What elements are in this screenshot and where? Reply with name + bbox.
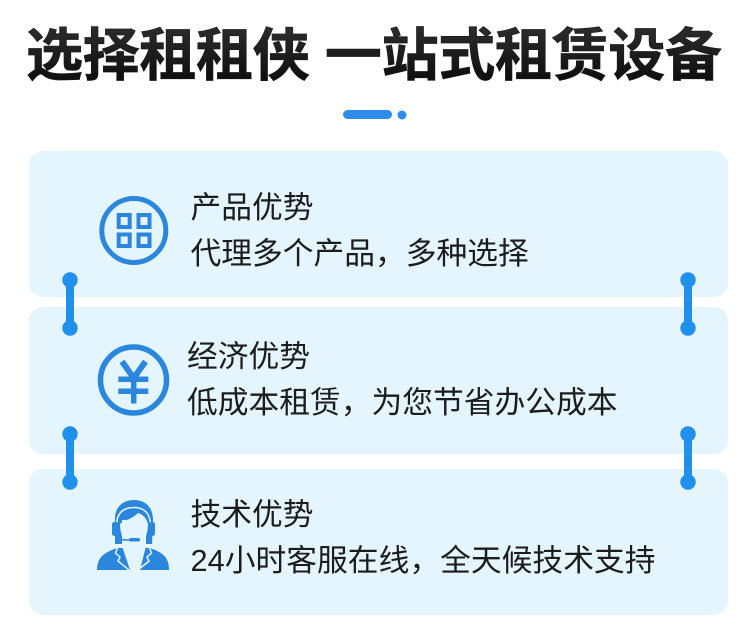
panel: economic advantage bbox=[29, 307, 728, 454]
icon: grid bbox=[102, 198, 166, 262]
heading: economic advantage: 经济优势 bbox=[187, 339, 310, 374]
icon: yen coin bbox=[100, 347, 166, 413]
panel: product advantage bbox=[29, 151, 728, 297]
connector: left bottom bbox=[62, 426, 78, 490]
text: technical advantage: 24小时客服在线，全天候技术支持 bbox=[190, 543, 656, 578]
icon: support agent bbox=[97, 500, 169, 570]
heading: technical advantage: 技术优势 bbox=[190, 497, 314, 532]
panel: technical advantage bbox=[29, 469, 728, 615]
text: product advantage: 代理多个产品，多种选择 bbox=[190, 236, 529, 271]
connector: right top bbox=[680, 272, 696, 336]
connector: left top bbox=[62, 272, 78, 336]
text: economic advantage: 低成本租赁，为您节省办公成本 bbox=[187, 385, 618, 420]
title: 选择租租侠 一站式租赁设备 bbox=[26, 24, 722, 88]
heading: product advantage: 产品优势 bbox=[190, 190, 314, 225]
title accent bbox=[343, 110, 406, 120]
connector: right bottom bbox=[680, 426, 696, 490]
